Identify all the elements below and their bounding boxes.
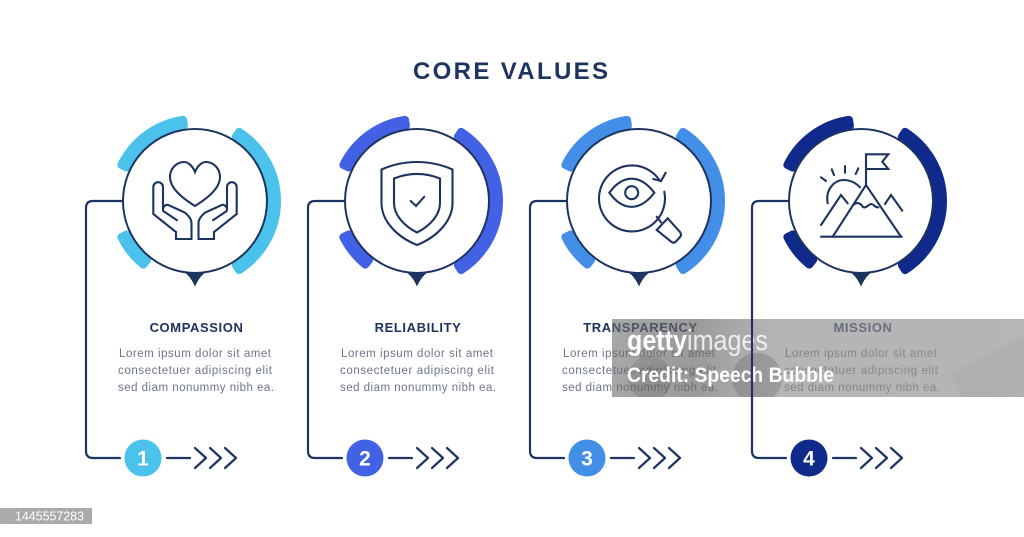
arrow [833, 448, 902, 468]
number badge [346, 440, 384, 476]
number badge: 1 [137, 448, 149, 470]
stock id tag: 1445557283 [15, 510, 84, 524]
number badge [790, 440, 828, 476]
getty logo text: getty [627, 325, 687, 357]
heading: RELIABILITY [375, 320, 461, 335]
number badge: 4 [803, 448, 815, 470]
pointer tail [404, 271, 430, 286]
description: consectetuer adipiscing elit [562, 365, 717, 377]
pointer tail [626, 271, 652, 286]
icon circle [345, 129, 489, 273]
panel: transparency [530, 120, 721, 476]
description: consectetuer adipiscing elit [118, 365, 273, 377]
heading: COMPASSION [150, 320, 243, 335]
description: Lorem ipsum dolor sit amet [563, 348, 716, 360]
watermark band [612, 319, 1024, 403]
description: sed diam nonummy nibh ea. [784, 382, 940, 394]
description: consectetuer adipiscing elit [784, 365, 939, 377]
description [340, 348, 496, 394]
credit text: Credit: Speech Bubble [627, 364, 834, 387]
stock id tag [0, 508, 92, 524]
pointer tail [848, 271, 874, 286]
connector line [530, 201, 566, 458]
description: consectetuer adipiscing elit [340, 365, 495, 377]
icon: heart in hands [153, 162, 237, 239]
icon: eye under magnifier [599, 165, 681, 243]
pointer tail [182, 271, 208, 286]
title: CORE VALUES [413, 58, 608, 85]
description: sed diam nonummy nibh ea. [340, 382, 496, 394]
description: sed diam nonummy nibh ea. [562, 382, 718, 394]
coloured arcs [343, 120, 499, 270]
col 4 connector line over watermark [752, 201, 788, 458]
icon circle [123, 129, 267, 273]
arrow [167, 448, 236, 468]
description [118, 348, 274, 394]
icon circle [567, 129, 711, 273]
panel: compassion [86, 120, 277, 476]
panel: reliability [308, 120, 499, 476]
coloured arcs [121, 120, 277, 270]
description: Lorem ipsum dolor sit amet [119, 348, 272, 360]
description: sed diam nonummy nibh ea. [118, 382, 274, 394]
arrow [611, 448, 680, 468]
panel: mission [784, 120, 943, 476]
coloured arcs [565, 120, 721, 270]
icon circle [789, 129, 933, 273]
number badge: 2 [359, 448, 371, 470]
description: Lorem ipsum dolor sit amet [785, 348, 938, 360]
connector line [308, 201, 344, 458]
coloured arcs [787, 120, 943, 270]
arrow [389, 448, 458, 468]
images logo text: images [687, 325, 768, 357]
connector line [86, 201, 122, 458]
icon: mountain with flag [821, 154, 902, 237]
description [784, 348, 940, 394]
heading: MISSION [833, 320, 893, 335]
number badge [124, 440, 162, 476]
description: Lorem ipsum dolor sit amet [341, 348, 494, 360]
description [562, 348, 718, 394]
icon: shield [382, 162, 452, 245]
number badge [568, 440, 606, 476]
heading: TRANSPARENCY [583, 320, 698, 335]
number badge: 3 [581, 448, 593, 470]
